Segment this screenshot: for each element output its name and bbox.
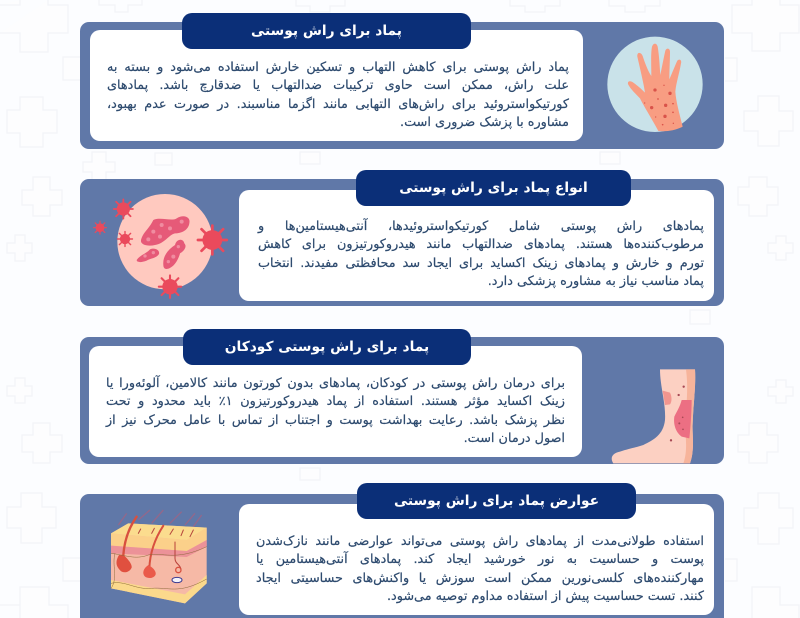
heading: side effects of ointment — [357, 483, 636, 519]
icon: hand with rash — [607, 36, 703, 132]
heading: ointment for skin rash — [182, 13, 471, 49]
text card — [89, 346, 582, 457]
body text: برای درمان راش پوستی در کودکان، پمادهای بدون کورتون مانند کالامین، آلوئه‌ورا یا — [106, 376, 565, 391]
body text: مهارکننده‌های کلسی‌نورین ممکن است سوزش یا واکنش‌های حساسیتی ایجاد — [256, 571, 704, 586]
heading: types of ointment — [356, 170, 631, 206]
panel: ointment for children — [80, 337, 724, 464]
icon: skin cross-section — [110, 510, 207, 604]
body text — [105, 374, 565, 446]
body text — [257, 218, 704, 289]
panel: ointment for skin rash — [80, 22, 724, 149]
body text: علت راش، ممکن است حاوی ترکیبات ضدالتهاب یا ضدقارچ باشد. پمادهای — [107, 78, 569, 93]
icon: leg with rash — [612, 369, 696, 464]
body text: مشاوره با پزشک ضروری است. — [400, 115, 569, 130]
heading: ointment for skin rash: پماد برای راش پوستی — [251, 23, 402, 39]
text card — [90, 30, 583, 141]
text card — [239, 504, 714, 615]
heading: ointment for children: پماد برای راش پوستی کودکان — [225, 339, 429, 355]
body text: پماد مناسب نیاز به مشاوره پزشکی دارد. — [488, 274, 704, 289]
body text — [107, 60, 570, 130]
heading: types of ointment: انواع پماد برای راش پوستی — [399, 180, 588, 196]
icon: rash circle with viruses — [93, 194, 228, 299]
panel: types of ointment — [80, 179, 724, 306]
body text: مرطوب‌کننده‌ها هستند. پمادهای ضدالتهاب مانند هیدروکورتیزون برای کاهش — [258, 237, 704, 252]
body text: پمادهای راش پوستی شامل کورتیکواستروئیدها، آنتی‌هیستامین‌ها و — [258, 219, 704, 234]
body text: کنند. تست حساسیت پیش از استفاده مداوم توصیه می‌شود. — [387, 589, 704, 604]
body text: تورم و خارش و پمادهای زینک اکساید برای ایجاد سد محافظتی مفیدند. انتخاب — [258, 256, 704, 271]
panel: side effects of ointment — [80, 494, 724, 618]
body text: استفاده طولانی‌مدت از پمادهای راش پوستی می‌تواند عوارضی مانند نازک‌شدن — [256, 534, 704, 549]
heading: ointment for children — [183, 329, 471, 365]
heading: side effects of ointment: عوارض پماد برای راش پوستی — [394, 493, 599, 509]
body text: پوست و حساسیت به نور خورشید ایجاد کند. پمادهای آنتی‌هیستامین یا — [256, 552, 704, 567]
body text: پماد راش پوستی برای کاهش التهاب و تسکین خارش استفاده می‌شود و بسته به — [107, 60, 569, 75]
body text: اصول درمان است. — [464, 431, 565, 446]
text card — [239, 190, 714, 301]
body text: زینک اکساید مؤثر هستند. استفاده از پماد هیدروکورتیزون ۱٪ باید محدود و تحت — [106, 394, 565, 409]
body text: کورتیکواستروئید برای راش‌های التهابی مانند اگزما مناسبند. در صورت عدم بهبود، — [107, 97, 569, 112]
body text: نظر پزشک باشد. رعایت بهداشت پوست و اجتناب از تماس با عامل محرک نیز از — [106, 413, 565, 428]
body text — [256, 534, 704, 604]
